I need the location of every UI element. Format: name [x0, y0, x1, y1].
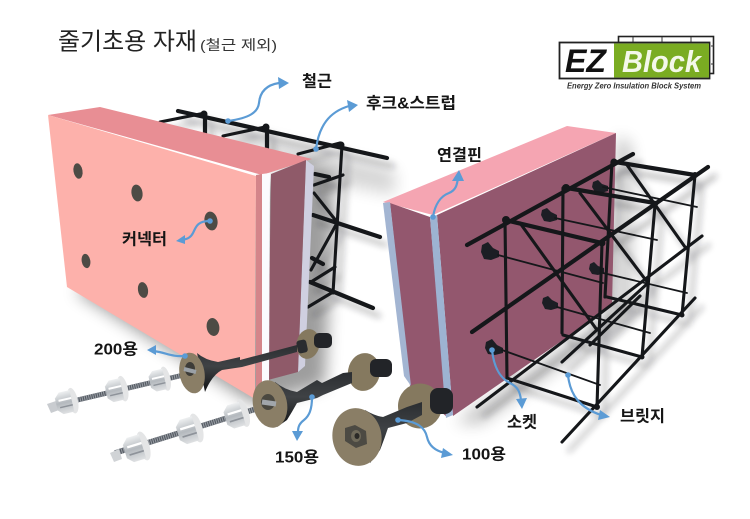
right insulation block	[383, 126, 616, 418]
callout: 후크&스트럽: 후크&스트럽	[366, 94, 456, 112]
block side face	[268, 160, 306, 380]
callout: 철근	[225, 72, 332, 124]
callout: 후크&스트럽	[313, 94, 456, 152]
block front face	[48, 115, 256, 399]
right rebar cage	[467, 154, 708, 442]
callout: 100용: 100용	[462, 446, 506, 464]
flange	[328, 404, 386, 470]
flange	[176, 351, 208, 395]
rod and body	[275, 372, 352, 427]
connector holes	[72, 163, 221, 337]
callout: 150용	[275, 394, 319, 466]
left insulation block	[48, 107, 314, 399]
left rebar cage	[160, 110, 387, 308]
callout: 200용	[94, 340, 188, 359]
bolt: 100	[328, 380, 453, 470]
title	[58, 28, 277, 56]
callout: 커넥터: 커넥터	[122, 230, 167, 248]
soft shadows	[75, 119, 715, 451]
far end	[294, 327, 322, 361]
hex nut	[345, 425, 367, 448]
edge face	[390, 203, 447, 417]
top face	[383, 126, 616, 215]
callout: 소켓	[489, 347, 537, 432]
white strip	[262, 173, 270, 388]
title: (철근 제외)	[200, 37, 277, 53]
blue strips	[383, 202, 411, 386]
callout: 연결핀	[430, 146, 482, 220]
sockets	[481, 180, 608, 355]
logo: EZ Block: Block	[622, 44, 703, 79]
callout: 소켓: 소켓	[507, 414, 537, 432]
callout: 연결핀: 연결핀	[437, 146, 482, 164]
side face	[437, 133, 616, 416]
logo: EZ Block: EZ	[565, 43, 607, 79]
threaded rod and nuts	[110, 398, 272, 466]
far end	[345, 351, 383, 393]
rod and body	[365, 402, 422, 463]
bolt: 200	[47, 327, 332, 417]
callout: 100용	[395, 417, 506, 464]
rod and body	[197, 345, 297, 392]
threaded rod and nuts	[47, 366, 192, 417]
lavender edge strip	[298, 160, 314, 372]
callout: 커넥터	[122, 218, 213, 248]
callout: 200용: 200용	[94, 340, 138, 358]
block top face	[48, 107, 312, 175]
title: 줄기초용 자재	[58, 28, 197, 56]
logo: EZ Block	[560, 36, 714, 90]
flange	[248, 377, 292, 431]
callout: 브릿지	[565, 372, 665, 426]
callout: 브릿지: 브릿지	[620, 408, 665, 426]
callout: 철근: 철근	[302, 72, 332, 90]
callout: 150용: 150용	[275, 448, 319, 466]
logo: EZ Block: Energy Zero Insulation Block System	[567, 82, 701, 90]
far end	[394, 380, 446, 432]
bolt: 150	[110, 351, 392, 466]
